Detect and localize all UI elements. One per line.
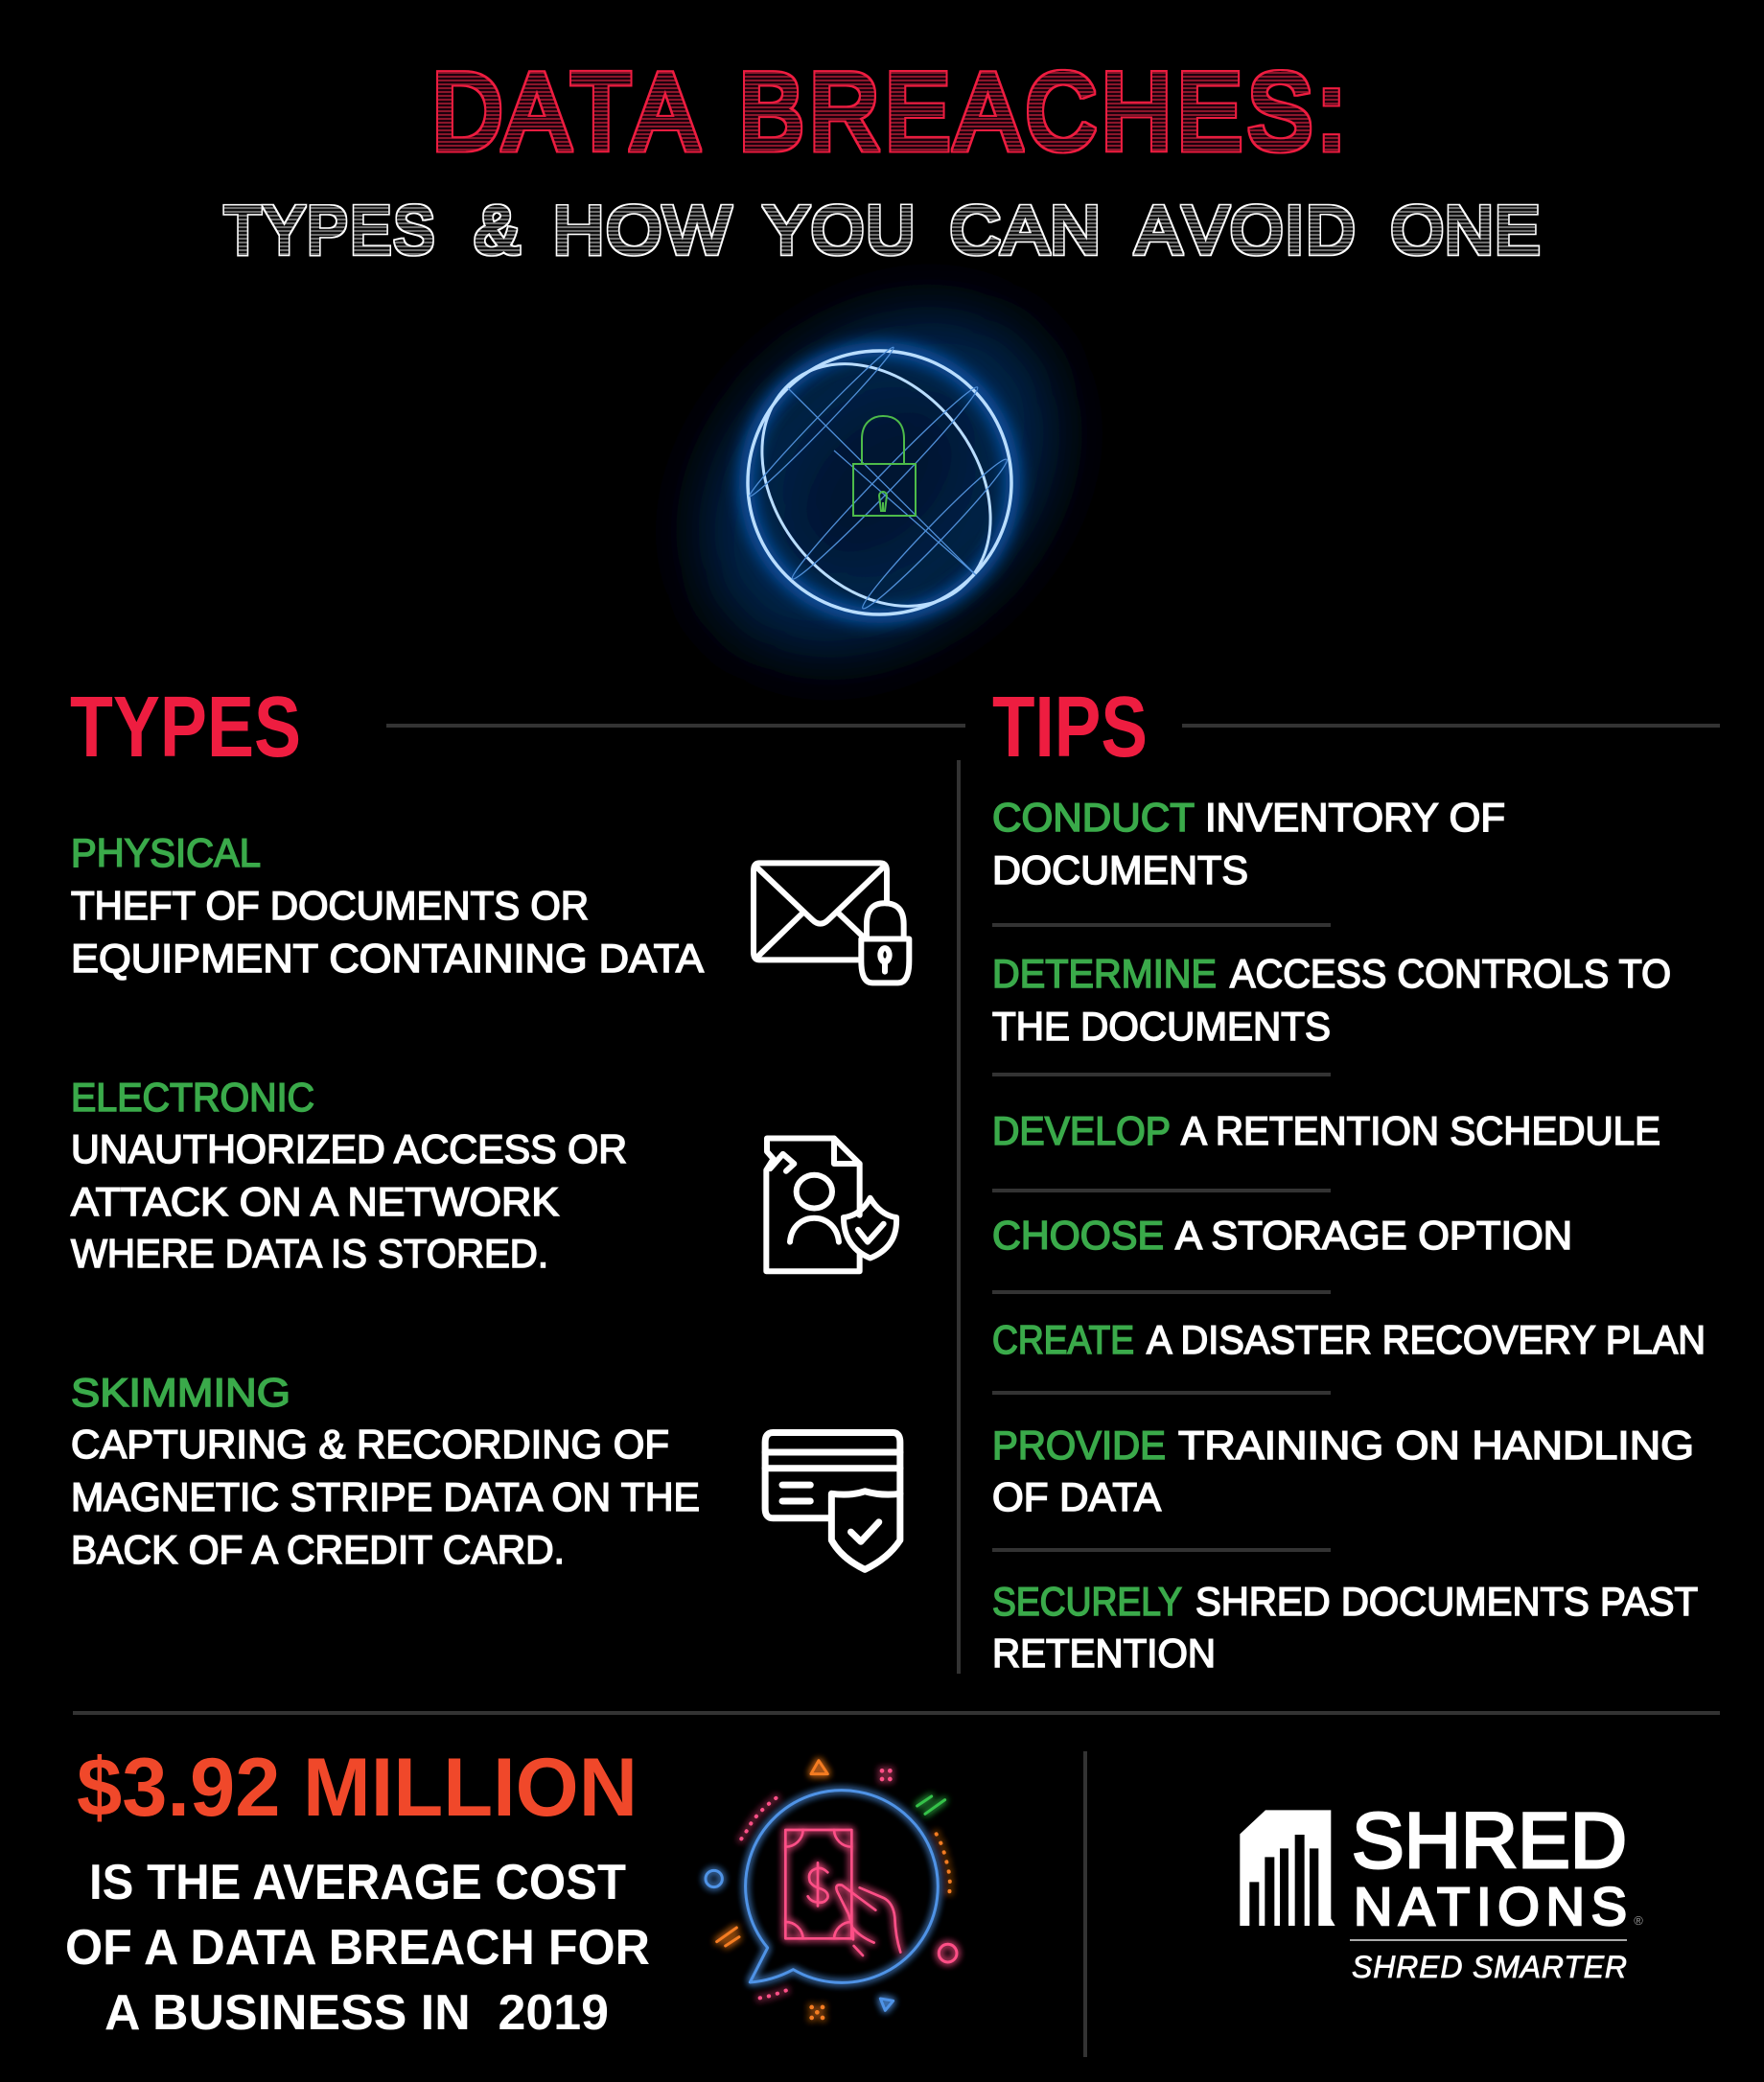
tip: provide training: TRAINING ON HANDLING [1178, 1423, 1694, 1468]
logo wordmark: ® [1634, 1913, 1643, 1928]
panel: physical: PHYSICAL [71, 830, 261, 875]
subtitle: & [475, 193, 520, 267]
icon: glowing globe with padlock [589, 197, 1170, 768]
tip: provide training: OF DATA [992, 1474, 1161, 1519]
icon: envelope with lock [754, 863, 909, 983]
panel: skimming: SKIMMING [71, 1370, 290, 1415]
tip: securely shred: SHRED DOCUMENTS PAST [1195, 1579, 1698, 1624]
callout: average cost statistic: OF A DATA BREACH FOR [65, 1920, 650, 1976]
tip: securely shred [992, 1579, 1698, 1676]
subtitle [224, 193, 1540, 268]
title: data breaches: BREACHES: [739, 52, 1345, 172]
logo wordmark: SHRED SMARTER [1352, 1950, 1627, 1984]
heading: tips: TIPS [992, 680, 1148, 775]
subtitle: TYPES [224, 194, 434, 268]
icon: document with person and shield [766, 1139, 896, 1271]
panel: electronic [71, 1075, 627, 1276]
tip: determine access controls: DETERMINE [992, 951, 1217, 996]
tip: provide training: PROVIDE [992, 1423, 1166, 1468]
heading: types: TYPES [70, 680, 301, 775]
subtitle: CAN [950, 194, 1101, 268]
tip: provide training [992, 1423, 1694, 1519]
panel: electronic: ELECTRONIC [71, 1075, 314, 1120]
panel: electronic: UNAUTHORIZED ACCESS OR [71, 1126, 627, 1171]
callout: average cost statistic: IS THE AVERAGE COST [89, 1855, 626, 1910]
tip: create disaster recovery plan: CREATE [992, 1317, 1134, 1362]
callout: average cost statistic: A BUSINESS IN 2019 [104, 1985, 609, 2041]
tip: create disaster recovery plan: A DISASTER RECOVERY PLAN [1147, 1317, 1706, 1362]
subtitle: HOW [553, 194, 731, 268]
tip: conduct inventory: DOCUMENTS [992, 847, 1248, 892]
panel: skimming [71, 1370, 700, 1572]
logo mark: building with bars [1240, 1810, 1335, 1926]
title: data breaches [432, 52, 1345, 172]
subtitle: ONE [1391, 193, 1540, 267]
tip: choose storage option: A STORAGE OPTION [1175, 1213, 1572, 1258]
logo wordmark [1350, 1797, 1643, 1984]
subtitle: AVOID [1136, 193, 1355, 267]
tip: conduct inventory: CONDUCT [992, 795, 1195, 840]
logo wordmark: SHRED [1352, 1797, 1627, 1885]
tip: choose storage option [992, 1213, 1572, 1258]
tip: securely shred: SECURELY [992, 1579, 1182, 1624]
tip: develop retention schedule: DEVELOP [992, 1108, 1171, 1153]
panel: electronic: WHERE DATA IS STORED. [71, 1231, 548, 1276]
callout: average cost statistic: $3.92 MILLION [77, 1742, 638, 1834]
callout: average cost statistic [65, 1742, 650, 2041]
tip: conduct inventory: INVENTORY OF [1205, 795, 1505, 840]
panel: physical: EQUIPMENT CONTAINING DATA [71, 936, 704, 981]
tip: develop retention schedule [992, 1108, 1660, 1153]
tip: choose storage option: CHOOSE [992, 1213, 1164, 1258]
title: data breaches: DATA [432, 52, 697, 172]
icon: neon hand holding money in speech bubble [706, 1761, 957, 2018]
tip: determine access controls [992, 951, 1671, 1049]
logo: shred nations [1240, 1810, 1335, 1926]
tip: determine access controls: ACCESS CONTROLS TO [1230, 951, 1671, 996]
tip: develop retention schedule: A RETENTION SCHEDULE [1181, 1108, 1660, 1153]
panel: physical: THEFT OF DOCUMENTS OR [71, 883, 589, 928]
panel: skimming: MAGNETIC STRIPE DATA ON THE [71, 1474, 700, 1519]
panel: electronic: ATTACK ON A NETWORK [71, 1179, 559, 1224]
panel: physical [71, 830, 704, 981]
subtitle: YOU [764, 193, 915, 267]
panel: skimming: BACK OF A CREDIT CARD. [71, 1527, 565, 1572]
panel: skimming: CAPTURING & RECORDING OF [71, 1422, 669, 1467]
icon: credit card with shield [765, 1433, 900, 1569]
logo wordmark: NATIONS [1354, 1876, 1627, 1936]
tip: determine access controls: THE DOCUMENTS [992, 1004, 1331, 1049]
tip: securely shred: RETENTION [992, 1631, 1216, 1676]
tip: conduct inventory [992, 795, 1505, 892]
